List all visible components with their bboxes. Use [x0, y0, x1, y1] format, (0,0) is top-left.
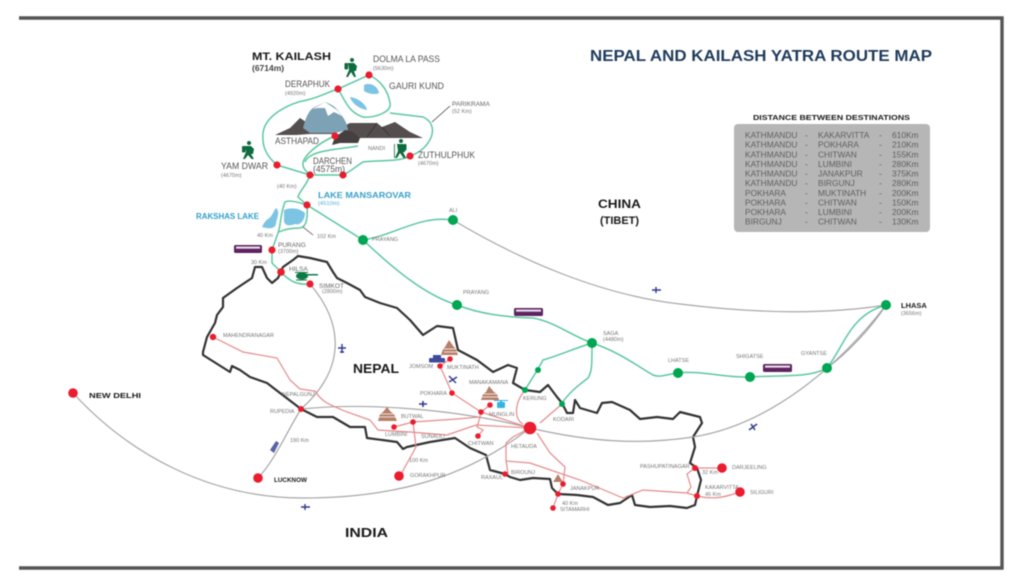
Gauri Kund lakes: [350, 84, 379, 110]
table rows: KATHMANDU: [745, 140, 797, 150]
Kailash area labels: PARIKRAMA: [452, 101, 490, 108]
Kailash area labels: (6714m): [252, 63, 284, 73]
icon: helicopter: [295, 272, 318, 280]
table rows: KATHMANDU: [745, 178, 797, 188]
table rows: -: [805, 207, 808, 217]
India labels: GORAKHPUR: [410, 473, 445, 479]
table rows: 150Km: [892, 197, 919, 207]
table rows: -: [805, 149, 808, 159]
table rows: POKHARA: [818, 140, 859, 150]
flight routes: [73, 220, 886, 498]
Tibet labels: (3656m): [901, 311, 922, 317]
Kailash area labels: DOLMA LA PASS: [373, 54, 440, 64]
table rows: POKHARA: [745, 188, 786, 198]
Tibet labels: CHINA: [598, 199, 641, 211]
table rows: 280Km: [892, 159, 919, 169]
Nepal labels: 40 Km: [562, 501, 578, 507]
table rows: LUMBINI: [818, 207, 852, 217]
Kailash area labels: ASTHAPAD: [275, 136, 319, 146]
table rows: 200Km: [892, 207, 919, 217]
Nepal labels: NEPAL: [353, 361, 399, 376]
Nepal labels: SUNAULI: [421, 434, 445, 440]
table rows: -: [879, 207, 882, 217]
table rows: BIRGUNJ: [818, 178, 855, 188]
table rows: -: [879, 217, 882, 227]
Kailash area labels: (4670m): [418, 161, 439, 167]
table rows: CHITWAN: [818, 149, 857, 159]
icons: airplanes: [301, 287, 757, 510]
Kailash area labels: DARCHEN: [313, 156, 352, 166]
Nepal labels: MAHENDRANAGAR: [223, 333, 274, 339]
table rows: 200Km: [892, 188, 919, 198]
Tibet labels: LHASA: [901, 301, 927, 310]
table rows: POKHARA: [745, 207, 786, 217]
Kailash area labels: (4510m): [318, 201, 340, 207]
Nepal labels: SITAMARHI: [560, 507, 590, 513]
Kailash area labels: (3700m): [278, 249, 299, 255]
Nepal labels: BUTWAL: [401, 414, 424, 420]
Nepal border: [203, 256, 702, 508]
Tibet labels: [372, 199, 927, 423]
Nepal labels: [223, 333, 774, 513]
Nepal labels: HETAUDA: [511, 444, 537, 450]
table rows: POKHARA: [745, 197, 786, 207]
Kailash area labels: SIMKOT: [319, 283, 344, 290]
India labels: NEW DELHI: [89, 391, 141, 400]
Kailash area labels: 102 Km: [317, 234, 336, 240]
table rows: -: [879, 188, 882, 198]
title: NEPAL AND KAILASH YATRA ROUTE MAP: [590, 48, 932, 65]
Nepal labels: LUMBINI: [385, 432, 408, 438]
table rows: -: [805, 130, 808, 140]
table rows: MUKTINATH: [818, 188, 866, 198]
India labels: 190 Km: [290, 438, 309, 444]
Kailash area labels: GAURI KUND: [389, 81, 444, 91]
Nepal labels: BIROUNJ: [511, 470, 535, 476]
Nepal labels: RUPEDIA: [270, 409, 295, 415]
Kailash area labels: (4670m): [221, 173, 242, 179]
table rows: -: [805, 197, 808, 207]
table rows: 280Km: [892, 178, 919, 188]
Kailash area labels: PURANG: [278, 242, 306, 249]
table rows: KAKARVITTA: [818, 130, 870, 140]
Kailash area labels: LAKE MANSAROVAR: [318, 190, 411, 200]
table rows: -: [879, 149, 882, 159]
Nepal labels: NEPALGUNJ: [282, 392, 315, 398]
table rows: -: [879, 140, 882, 150]
table rows: KATHMANDU: [745, 149, 797, 159]
Kailash area labels: [196, 51, 490, 295]
table rows: -: [805, 188, 808, 198]
Tibet labels: PRAYANG: [372, 237, 398, 243]
Nepal labels: JOMSOM: [409, 364, 434, 370]
Kailash area labels: MT. KAILASH: [252, 51, 331, 63]
table rows: JANAKPUR: [818, 168, 863, 178]
icons: temples: [378, 340, 563, 482]
location markers: [68, 71, 891, 511]
Nepal labels: MANAKAMANA: [469, 380, 508, 386]
table rows: 130Km: [892, 217, 919, 227]
table rows: 155Km: [892, 149, 919, 159]
Tibet labels: ALI: [449, 208, 458, 214]
table rows: [745, 130, 919, 227]
table rows: 375Km: [892, 168, 919, 178]
table rows: -: [805, 168, 808, 178]
Kailash area labels: ZUTHULPHUK: [418, 150, 475, 160]
table rows: -: [879, 168, 882, 178]
Nepal labels: SILIGURI: [750, 490, 774, 496]
Nepal labels: POKHARA: [420, 391, 447, 397]
icon: bus near Prayang: [514, 308, 543, 316]
Tibet labels: PRAYANG: [463, 290, 489, 296]
table rows: KATHMANDU: [745, 159, 797, 169]
icon: hiker at Zuthulphuk: [394, 139, 406, 158]
Nepal labels: 32 Km: [702, 470, 718, 476]
Tibet labels: KODARI: [553, 417, 575, 423]
Mt. Kailash mountain illustration: [275, 102, 423, 162]
icon: bus near Purang: [234, 245, 262, 253]
table rows: -: [805, 140, 808, 150]
Tibet labels: (TIBET): [600, 215, 639, 227]
Tibet labels: LHATSE: [668, 358, 689, 364]
table background: [734, 124, 930, 232]
Tibet labels: GYANTSE: [801, 351, 827, 357]
Kailash area labels: DERAPHUK: [285, 79, 330, 89]
table rows: CHITWAN: [818, 197, 857, 207]
Rakshas Lake and Mansarovar lake: [262, 208, 305, 228]
India labels: LUCKNOW: [274, 478, 307, 484]
panel: distance table: [734, 113, 930, 232]
Kailash area labels: (5630m): [373, 66, 394, 72]
Nepal labels: JANAKPUR: [570, 486, 599, 492]
icon: cable car at Mugling: [494, 400, 508, 408]
Kailash area labels: (2800m): [322, 289, 343, 295]
Nepal labels: MUKTINATH: [447, 365, 479, 371]
Kailash area labels: 40 Km: [257, 233, 273, 239]
Kailash area labels: HILSA: [289, 266, 308, 273]
Nepal labels: PASHUPATINAGAR: [640, 464, 690, 470]
Nepal labels: CHITWAN: [468, 441, 493, 447]
India labels: 100 Km: [409, 458, 428, 464]
road routes in Nepal: [213, 337, 740, 508]
icon: bus near Shigatse: [763, 364, 792, 372]
Tibet labels: (4480m): [603, 337, 624, 343]
table rows: -: [879, 178, 882, 188]
Kailash area labels: (4920m): [285, 91, 306, 97]
Tibet labels: SHIGATSE: [736, 354, 764, 360]
Nepal labels: MUNGLIN: [489, 412, 514, 418]
table rows: 210Km: [892, 140, 919, 150]
table rows: KATHMANDU: [745, 168, 797, 178]
icon: jeep near Jomsom: [429, 355, 445, 362]
table rows: -: [805, 159, 808, 169]
table rows: KATHMANDU: [745, 130, 797, 140]
icon: car near Lucknow: [270, 441, 279, 453]
table rows: -: [879, 159, 882, 169]
Kailash area labels: YAM DWAR: [221, 161, 268, 171]
icon: hiker at Dolma La: [344, 58, 357, 77]
table rows: -: [805, 178, 808, 188]
table heading: DISTANCE BETWEEN DESTINATIONS: [753, 113, 910, 122]
trekking and road routes in Tibet: [263, 75, 886, 403]
table rows: 610Km: [892, 130, 919, 140]
table rows: BIRGUNJ: [745, 217, 782, 227]
Kailash area labels: RAKSHAS LAKE: [196, 212, 259, 221]
Nepal labels: RAXAUL: [481, 475, 503, 481]
Tibet labels: KERUNG: [523, 396, 547, 402]
Nepal labels: DARJEELING: [732, 465, 767, 471]
Kailash area labels: NANDI: [368, 146, 386, 152]
India labels: INDIA: [345, 525, 389, 540]
Kailash area labels: (52 Km): [452, 109, 472, 115]
table rows: CHITWAN: [818, 217, 857, 227]
Kailash area labels: (40 Km): [277, 184, 297, 190]
Nepal labels: KAKARVITTA: [705, 485, 739, 491]
Tibet labels: SAGA: [603, 331, 619, 337]
Nepal labels: 45 Km: [705, 492, 721, 498]
Kailash area labels: (4575m): [313, 164, 345, 174]
icon: hiker at Yam Dwar: [242, 141, 254, 159]
Kailash area labels: 30 Km: [251, 260, 267, 266]
table rows: LUMBINI: [818, 159, 852, 169]
table rows: -: [879, 130, 882, 140]
table rows: -: [805, 217, 808, 227]
table rows: -: [879, 197, 882, 207]
India labels: [89, 391, 445, 540]
